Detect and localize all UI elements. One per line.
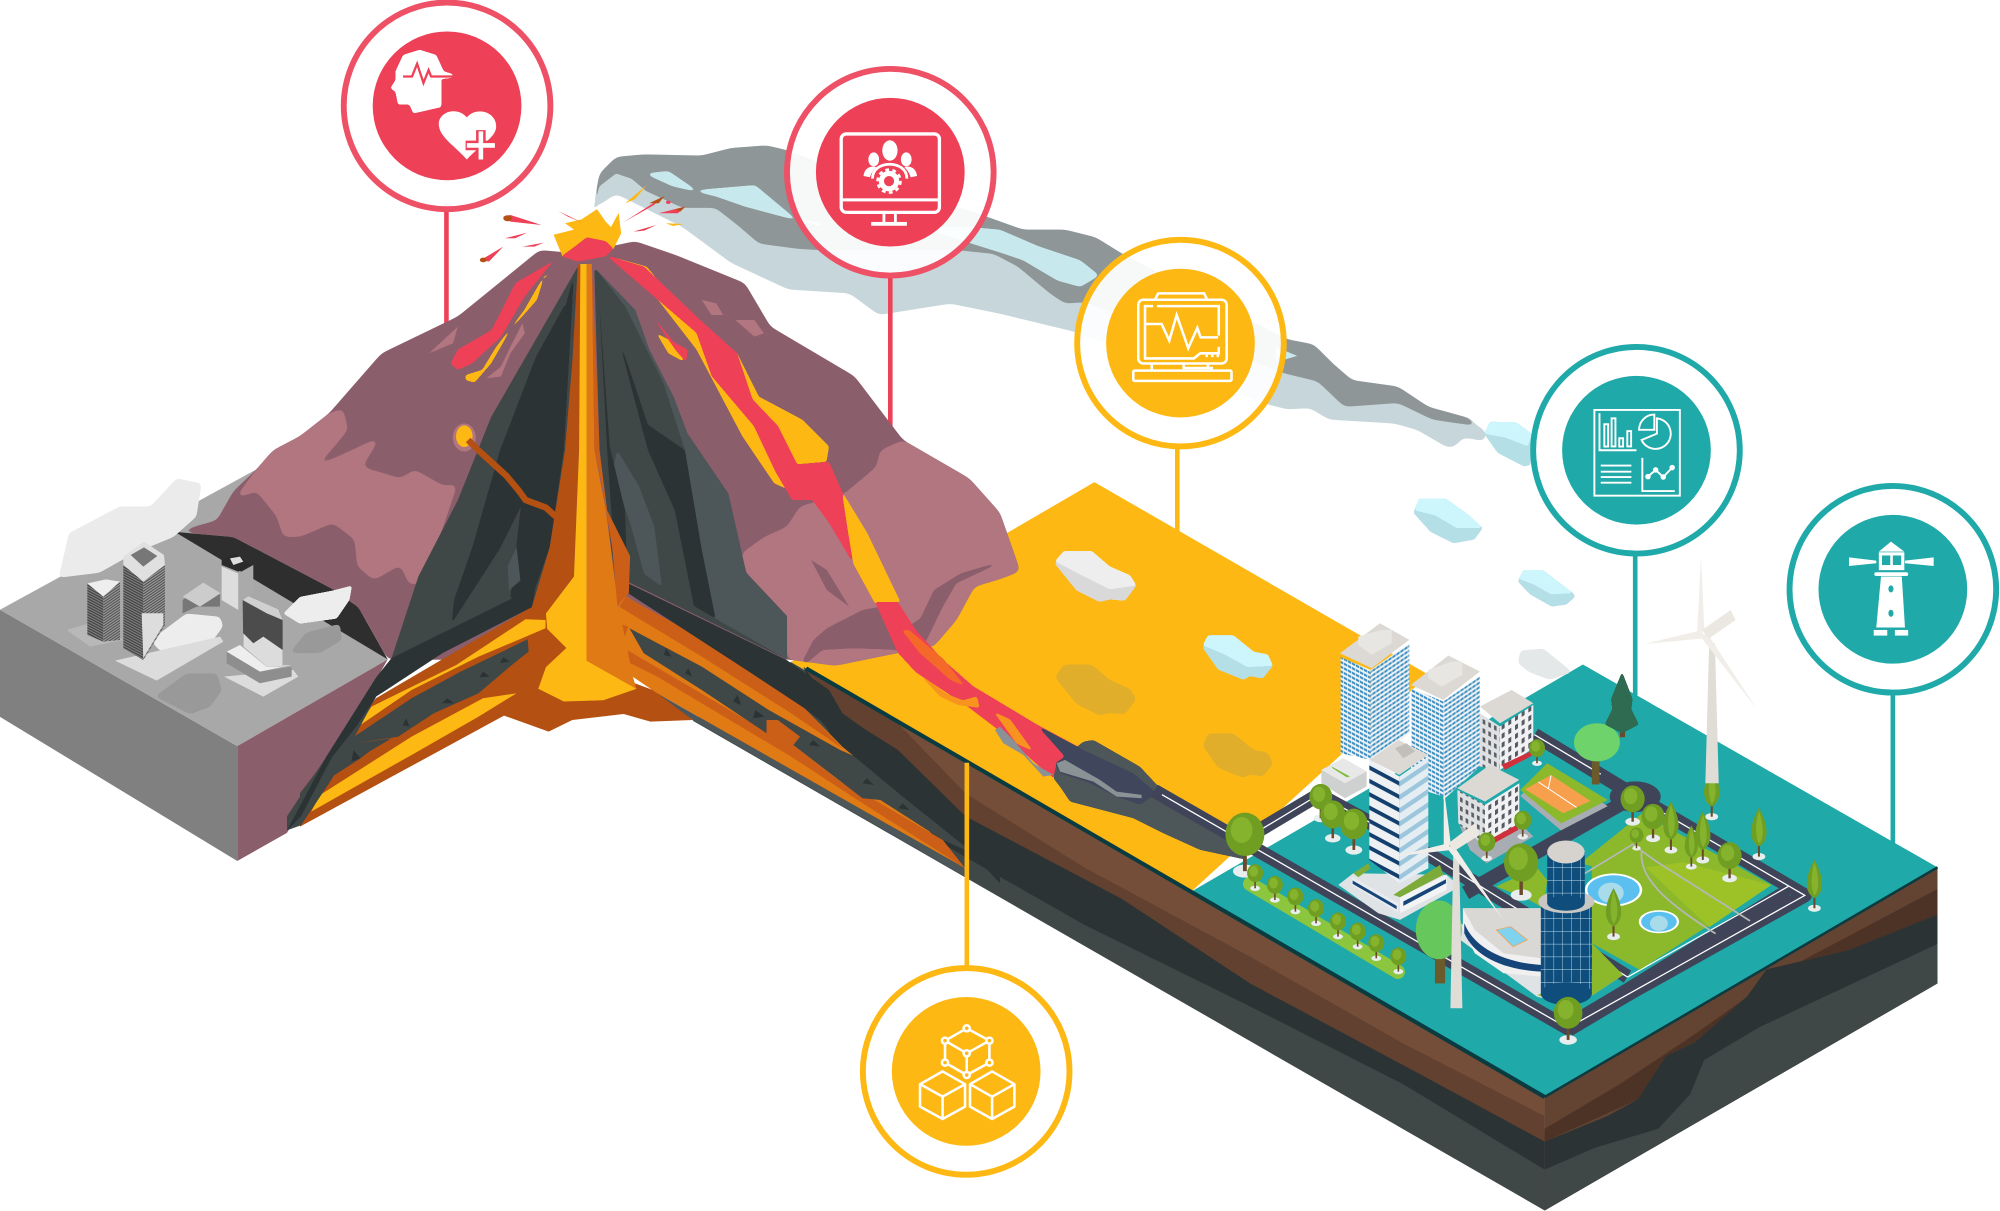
wind turbines — [1393, 556, 1757, 1008]
tree strip along the road — [1250, 884, 1398, 972]
large light green trees and conifer — [1416, 672, 1639, 983]
cooled lava flow — [995, 725, 1247, 860]
curved building with pool — [1456, 908, 1623, 1007]
badge: monitoring device — [1077, 240, 1284, 446]
badge: data dashboard — [1533, 347, 1740, 554]
lava flow: right slope — [606, 255, 1087, 778]
connector line: bottom yellow — [965, 763, 969, 969]
soil slab: front right face — [1545, 867, 1937, 1210]
teal ground plane — [1191, 665, 1937, 1097]
grey monochrome buildings — [67, 542, 298, 697]
central lava conduit — [532, 264, 636, 702]
badge: connected blocks — [863, 968, 1070, 1175]
icon: lighthouse — [1849, 542, 1934, 636]
icon: network cube and two cubes — [920, 1025, 1014, 1119]
icon: monitor and people with gear — [841, 134, 939, 226]
badge: monitor with team — [787, 69, 994, 276]
buildings: towers and apartment blocks — [1321, 623, 1533, 920]
trees — [1225, 739, 1822, 1045]
grey clouds on the left block — [59, 478, 352, 655]
right flank of the volcano — [594, 270, 787, 659]
small rock patches — [429, 300, 764, 378]
basketball court — [1520, 763, 1608, 830]
lava flow: left slope — [450, 256, 563, 383]
clouds beyond the city — [1413, 422, 1575, 680]
icon: vital signs monitor — [1133, 293, 1232, 381]
city roads — [1154, 735, 1805, 1028]
cross-section: magma chambers and rock layers — [300, 583, 1000, 883]
grey city block — [0, 469, 388, 861]
darker rock streak on right slope — [802, 560, 1000, 663]
road markings — [1162, 735, 1805, 1028]
soil slab: front left face — [693, 662, 1545, 1210]
left flank of the volcano — [287, 267, 578, 830]
smoke plume — [593, 145, 1486, 448]
volcano crater and eruption — [480, 185, 686, 262]
roundabout — [1610, 781, 1661, 812]
badge: lighthouse — [1790, 486, 1996, 693]
side dike with lava pocket — [453, 423, 559, 519]
lighter rock: right slope — [741, 440, 1020, 666]
lighter rock: left slope — [233, 408, 458, 585]
glass tower with helipad — [1538, 841, 1594, 1005]
icon: head with pulse — [390, 50, 453, 114]
icon: heart with plus — [439, 111, 496, 161]
park lawn — [1580, 813, 1771, 970]
icon: report with charts — [1594, 410, 1680, 496]
volcano mountain body — [175, 241, 1020, 666]
connector lines — [446, 204, 1893, 848]
small lawn by the glass tower — [1496, 867, 1547, 908]
yellow ground plane — [791, 482, 1429, 892]
badge: health and wellbeing — [344, 3, 550, 209]
park: paths and ponds — [1584, 844, 1771, 934]
clouds and shadows over yellow ground — [1055, 551, 1273, 778]
